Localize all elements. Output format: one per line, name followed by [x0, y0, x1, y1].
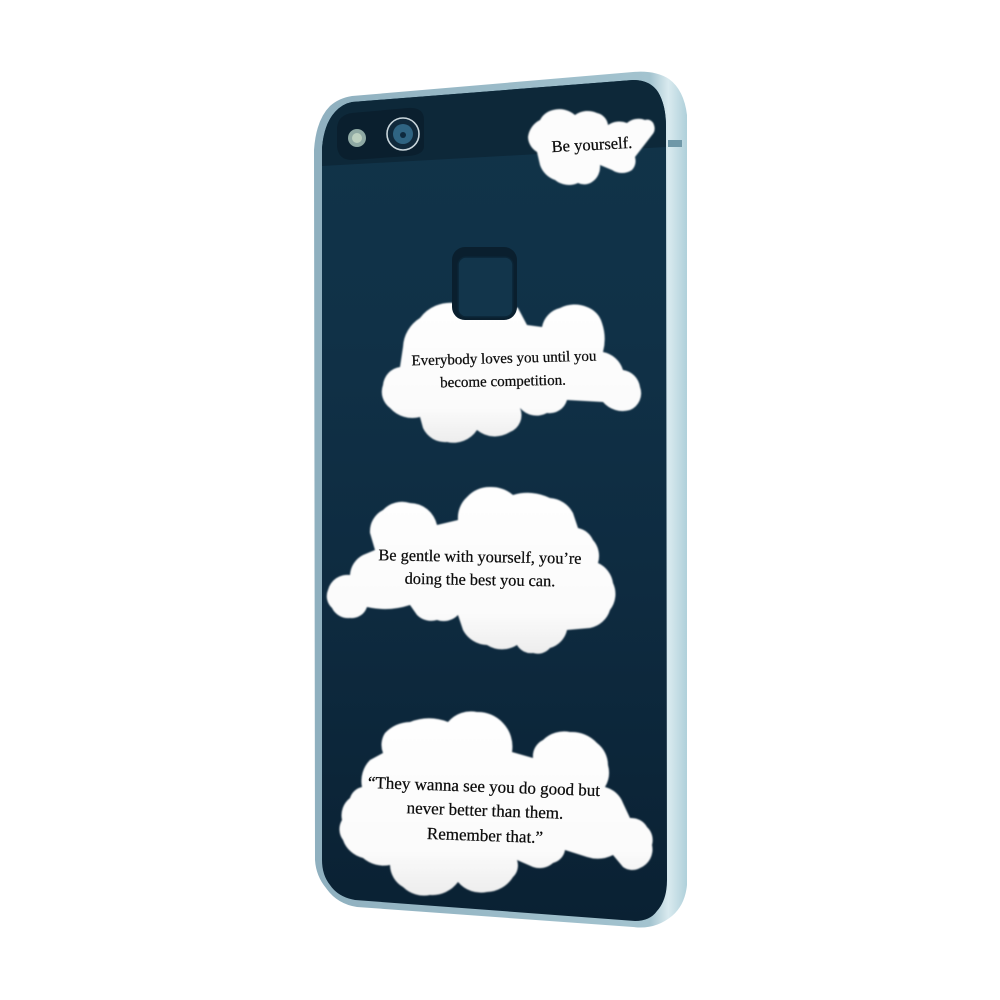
text: be gentle: Be gentle with yourself, you’re	[378, 545, 582, 568]
camera module	[337, 108, 424, 160]
icon: flash	[348, 129, 366, 147]
side button strip	[668, 140, 682, 147]
cloud: everybody loves you	[382, 300, 641, 443]
text: they wanna: Remember that.”	[427, 824, 543, 847]
text: everybody loves you	[411, 349, 597, 391]
cloud: they wanna	[339, 711, 653, 896]
icon: camera lens	[387, 118, 419, 150]
text: they wanna: “They wanna see you do good but	[368, 773, 601, 800]
text: they wanna	[368, 773, 601, 847]
text: be gentle: doing the best you can.	[405, 569, 555, 590]
cloud: be gentle	[327, 487, 615, 654]
icon: fingerprint sensor	[452, 247, 517, 320]
text: everybody loves you: Everybody loves you until you	[411, 349, 597, 369]
text: be gentle	[378, 545, 582, 590]
phone back panel	[322, 80, 667, 921]
cloud: be yourself	[528, 109, 655, 185]
camera band	[322, 80, 666, 166]
text: everybody loves you: become competition.	[440, 373, 566, 391]
text: be yourself: Be yourself.	[551, 133, 633, 156]
phone case	[314, 72, 687, 928]
text: they wanna: never better than them.	[406, 798, 564, 823]
